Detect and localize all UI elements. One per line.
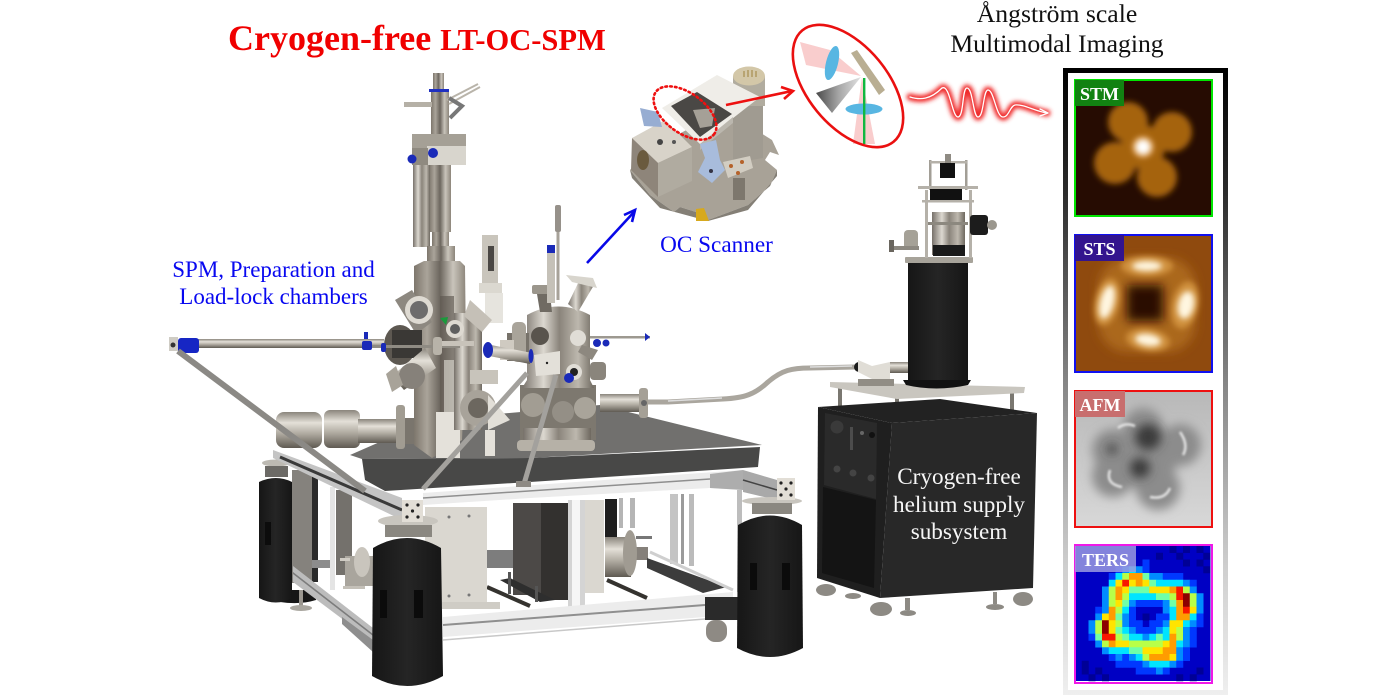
valve assembly	[479, 235, 503, 323]
tall right block	[733, 98, 763, 163]
panel: STM	[1075, 80, 1212, 216]
square junction block	[534, 351, 560, 376]
optics detail ellipse	[771, 5, 925, 167]
table front face	[362, 447, 760, 491]
scanner base plate	[630, 120, 779, 220]
center posts and second panel	[568, 498, 635, 607]
casters and feet	[816, 584, 1033, 616]
tower main body	[414, 261, 466, 458]
tower cylinders	[413, 165, 455, 262]
arrow: scanner to optics	[726, 87, 793, 105]
plate mounts	[858, 379, 894, 386]
support posts	[838, 385, 1014, 422]
front-right isolator leg	[737, 497, 803, 657]
helium cryostat column	[903, 257, 973, 388]
STS map	[1090, 256, 1203, 354]
secondary cylinder	[454, 313, 482, 430]
frame corner cube right	[777, 478, 795, 500]
label: SPM chambers: Load-lock chambers	[179, 284, 368, 309]
green laser	[863, 78, 865, 144]
right thin rod with knobs	[590, 333, 650, 347]
front-left isolator leg	[372, 515, 443, 686]
machine: long horizontal manipulator	[169, 332, 474, 355]
panel: STS	[1075, 235, 1212, 372]
cabinet left face	[817, 407, 892, 598]
machine: SPM chamber tower	[384, 73, 510, 458]
lower lens	[846, 104, 882, 114]
transfer hose	[648, 362, 864, 402]
right-top aluminium beam	[743, 470, 777, 500]
label: helium subsystem: subsystem	[911, 519, 1007, 545]
upper lens	[822, 45, 842, 81]
heading: multimodal imaging: Multimodal Imaging	[950, 29, 1164, 58]
control panel	[824, 413, 877, 499]
left block faces	[631, 138, 658, 197]
cabinet right face	[880, 413, 1037, 598]
caster and lower black unit	[705, 597, 738, 642]
under-table rails	[487, 580, 647, 606]
yellow insert	[696, 208, 709, 221]
STS tag: STS	[1083, 239, 1116, 259]
back-left isolator leg	[259, 460, 318, 611]
left cross chamber	[384, 325, 422, 365]
upper white cage	[662, 75, 760, 144]
lower beam	[853, 77, 875, 144]
tower collar	[408, 134, 466, 165]
lower-left frame beam	[293, 560, 373, 652]
red outline	[771, 5, 925, 167]
right rear frame posts	[647, 490, 742, 593]
AFM molecule	[1092, 408, 1201, 510]
panel: TERS	[1075, 545, 1212, 683]
large viewport flange	[395, 290, 433, 334]
parabolic cone	[816, 77, 861, 113]
arrow: chamber to scanner	[587, 210, 635, 263]
OC scanner render	[630, 66, 779, 221]
TERS heatmap	[1075, 546, 1210, 681]
chamber ports	[500, 322, 606, 383]
label: helium subsystem: Cryogen-free	[897, 464, 1021, 490]
machine: left horizontal port module	[276, 405, 417, 449]
title: Cryogen-free LT-OC-SPM	[228, 18, 606, 58]
frame corner cube left	[402, 500, 423, 522]
incoming beam	[800, 42, 861, 76]
silver support plate	[830, 382, 1025, 399]
wave signal arrow	[910, 88, 1048, 117]
rear grey beam	[487, 550, 513, 568]
front-top aluminium beam	[423, 470, 743, 505]
top ports	[532, 275, 597, 312]
lower flanged section	[517, 385, 596, 451]
lower cabinet door	[822, 487, 876, 588]
STM tag: STM	[1080, 84, 1119, 104]
cabinet top face	[818, 399, 1037, 423]
small viewport flange	[440, 317, 464, 338]
under-table dark block	[500, 503, 568, 602]
label: helium subsystem: helium supply	[893, 492, 1025, 518]
upper-right angled flange	[464, 300, 492, 332]
under-table light panel	[425, 507, 500, 609]
helium supply subsystem	[648, 154, 1037, 616]
cryocooler assembly	[889, 154, 997, 258]
right horizontal port	[600, 388, 648, 418]
label: SPM chambers: SPM, Preparation and	[172, 257, 375, 282]
blue scanner arm	[640, 108, 662, 127]
vertical rods	[547, 205, 561, 303]
label: OC scanner: OC Scanner	[660, 232, 773, 258]
STM molecule	[1094, 102, 1192, 197]
small clamp	[733, 178, 745, 200]
lower diagonal port	[386, 348, 436, 392]
middle rear post	[330, 487, 352, 590]
left block top face	[632, 120, 692, 163]
imaging panel frame	[1066, 70, 1226, 692]
chamber body	[522, 306, 594, 388]
copper connector block	[723, 156, 753, 178]
red dotted highlight	[644, 76, 726, 150]
lower round flange and white bracket	[460, 370, 510, 456]
under-table cylinder device	[605, 530, 652, 577]
cream cylinder	[733, 66, 765, 106]
table top surface	[350, 405, 762, 459]
transfer connector	[858, 358, 913, 380]
panel: AFM	[1075, 391, 1212, 527]
machine: diagonal support struts	[178, 351, 556, 491]
AFM tag: AFM	[1080, 395, 1121, 415]
machine: vibration-isolated table and frame	[259, 405, 803, 686]
mirror	[851, 50, 885, 95]
blue scanner loop	[698, 140, 725, 183]
left-top aluminium beam	[273, 450, 402, 520]
machine: preparation and load-lock chamber	[483, 205, 650, 451]
connecting tube	[483, 342, 534, 364]
tower top neck and valves	[404, 73, 480, 137]
lower-front frame beam	[443, 592, 733, 640]
lower-left port behind leg	[340, 547, 373, 589]
TERS tag: TERS	[1082, 550, 1129, 570]
